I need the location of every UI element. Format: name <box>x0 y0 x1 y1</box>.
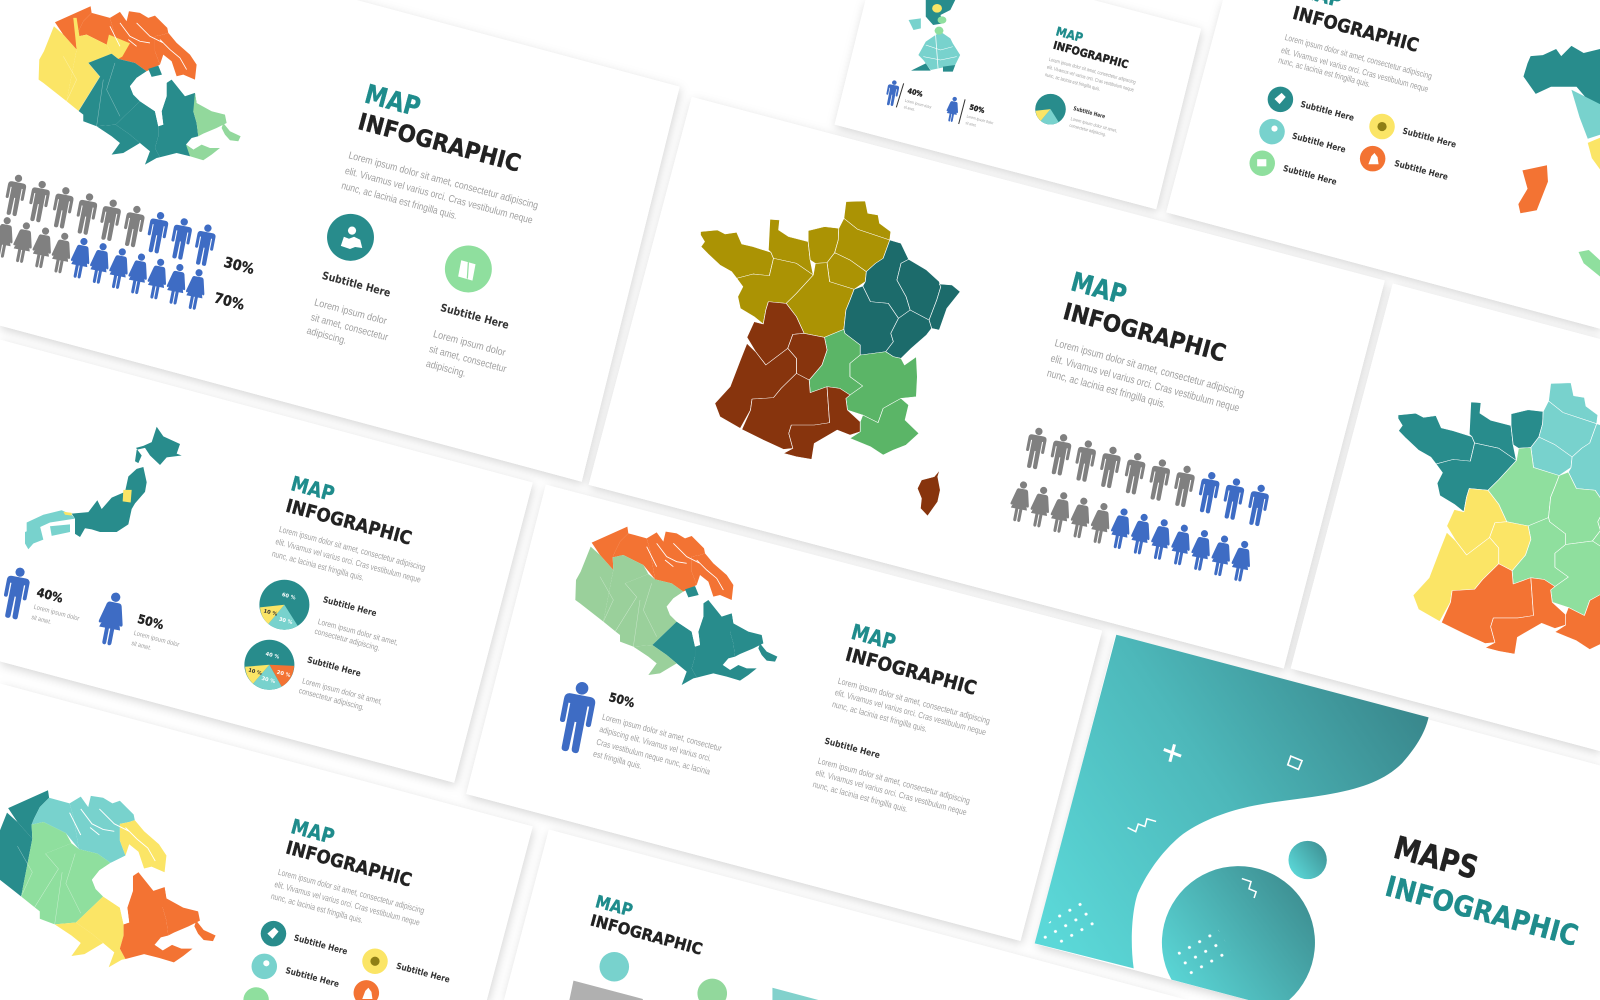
title INFOGRAPHIC: INFOGRAPHIC <box>843 644 979 700</box>
figure man 40 <box>0 566 32 621</box>
captions <box>298 617 399 712</box>
small captions: sit amet. <box>131 640 152 652</box>
people chart: women <box>1007 480 1254 583</box>
pie chart 2: 20 % <box>276 670 291 679</box>
title INFOGRAPHIC: INFOGRAPHIC <box>1290 3 1421 57</box>
body text: Lorem ipsum dolor sit amet, consectetur adipiscing <box>1048 57 1136 86</box>
map: Canada regions <box>0 790 216 967</box>
pie chart 2 <box>244 640 294 690</box>
small captions: sit amet. <box>903 104 916 112</box>
body text: nunc, ac lacinia est fringilla quis. <box>270 891 364 925</box>
map: Japan <box>25 427 182 549</box>
subtitle left: Subtitle Here <box>321 269 392 300</box>
teal swoosh shape <box>1035 635 1429 968</box>
panel: Canada slide middle <box>466 485 1102 941</box>
captions: consectetur adipiscing. <box>314 627 381 653</box>
small circle <box>1288 841 1327 879</box>
pie chart 1: 10 % <box>263 608 278 618</box>
title MAPS: MAPS <box>1390 830 1482 887</box>
body text: nunc, ac lacinia est fringilla quis. <box>831 699 928 734</box>
icon circles <box>243 921 388 1000</box>
subtitles: Subtitle Here <box>1291 132 1347 156</box>
map fragment <box>772 988 818 1000</box>
percent 70: 70% <box>212 290 246 314</box>
small text left: sit amet, consectetur <box>309 312 390 344</box>
icon: diamond <box>1288 756 1302 769</box>
small captions: Lorem ipsum dolor <box>966 113 994 126</box>
map: France regions <box>701 201 960 516</box>
small captions: sit amet. <box>31 614 52 626</box>
pie caption: Lorem ipsum dolor sit amet, <box>1070 116 1118 133</box>
pie chart 2: 10 % <box>247 668 262 677</box>
small captions: Lorem ipsum dolor <box>33 604 81 623</box>
body text: Lorem ipsum dolor sit amet, consectetur adipiscing <box>277 867 426 916</box>
figure man <box>554 679 599 755</box>
small text left <box>305 297 390 347</box>
subtitles: Subtitle Here <box>1393 159 1449 183</box>
title INFOGRAPHIC: INFOGRAPHIC <box>588 911 705 959</box>
title INFOGRAPHIC: INFOGRAPHIC <box>1382 869 1582 953</box>
map: United Kingdom <box>909 0 960 72</box>
subtitles: Subtitle Here <box>395 962 451 986</box>
icon circles <box>1249 87 1395 176</box>
subtitles: Subtitle Here <box>1401 127 1457 151</box>
panel: title slide <box>1035 635 1600 1000</box>
icon: map pin <box>327 214 374 261</box>
map: France regions coloured <box>1398 383 1600 654</box>
small captions <box>903 98 994 128</box>
description: Lorem ipsum dolor sit amet, consectetur <box>601 712 723 753</box>
body text: Lorem ipsum dolor sit amet, consectetur adipiscing <box>278 524 427 573</box>
icon: elevator <box>445 246 492 292</box>
figure man 40 <box>884 79 900 107</box>
subtitles <box>1282 100 1457 188</box>
people chart: men <box>1023 426 1271 527</box>
captions: consectetur adipiscing. <box>298 686 365 712</box>
body text: nunc, ac lacinia est fringilla quis. <box>271 548 365 583</box>
description: Cras vestibulum neque nunc, ac lacinia <box>595 737 711 777</box>
title INFOGRAPHIC: INFOGRAPHIC <box>1052 39 1130 71</box>
map: Italy <box>1518 46 1600 277</box>
icon: zigzag in circle <box>1242 879 1256 898</box>
small captions: Lorem ipsum dolor <box>904 98 933 110</box>
panel: Italy slide <box>1166 0 1600 329</box>
body text: elit. Vivamus vel varius orci. Cras vestibulum neque <box>344 166 534 227</box>
title MAP: MAP <box>289 814 337 849</box>
body text: elit. Vivamus vel varius orci. Cras vestibulum neque <box>1280 45 1430 94</box>
icon: light teal circle <box>599 952 629 982</box>
small text right: Lorem ipsum dolor <box>432 329 507 359</box>
title INFOGRAPHIC: INFOGRAPHIC <box>355 107 524 178</box>
pie chart 2: 30 % <box>261 676 276 685</box>
panel: UK slide <box>835 0 1201 209</box>
icon: plus <box>1164 744 1181 762</box>
percent 40: 40% <box>907 86 924 99</box>
pie chart <box>1035 94 1066 124</box>
title MAP: MAP <box>1068 267 1130 311</box>
small captions: Lorem ipsum dolor <box>133 630 181 649</box>
pie chart 1: 60 % <box>281 592 296 601</box>
body text: nunc, ac lacinia est fringilla quis. <box>340 181 458 222</box>
subtitle 1: Subtitle Here <box>322 595 378 619</box>
icon: green circle <box>697 979 727 1000</box>
subtitles <box>284 934 451 990</box>
captions: Lorem ipsum dolor sit amet, <box>301 676 383 706</box>
body text: elit. Vivamus vel varius orci. Cras vestibulum neque <box>274 536 422 585</box>
small text right <box>425 329 508 380</box>
map: Canada regions <box>39 6 241 165</box>
divider man <box>896 83 904 107</box>
pie chart 1 <box>259 580 309 630</box>
subtitle: Subtitle Here <box>1073 106 1106 120</box>
pie caption: consectetur adipiscing. <box>1069 123 1107 137</box>
panel: Japan slide <box>0 340 533 783</box>
title MAP: MAP <box>593 892 635 921</box>
percent 30: 30% <box>222 255 256 278</box>
body text: elit. Vivamus vel varius orci. Cras vestibulum neque <box>1046 65 1135 94</box>
small text left: adipiscing. <box>305 326 348 347</box>
title MAP: MAP <box>848 620 898 656</box>
subtitle: Subtitle Here <box>823 737 881 761</box>
pie chart 1: 30 % <box>278 617 293 626</box>
subtitles: Subtitle Here <box>1282 164 1338 188</box>
small captions <box>31 604 181 652</box>
subtitles: Subtitle Here <box>1299 100 1355 124</box>
panel: Canada slide bottom left <box>0 684 533 1000</box>
body text: elit. Vivamus vel varius orci. Cras vestibulum neque <box>834 687 987 737</box>
title INFOGRAPHIC: INFOGRAPHIC <box>283 838 414 891</box>
divider woman <box>959 99 965 124</box>
description <box>592 712 723 777</box>
percent 50: 50% <box>136 612 165 632</box>
description: est fringilla quis. <box>592 748 643 771</box>
small text right: sit amet, consectetur <box>428 344 508 375</box>
title MAP: MAP <box>289 471 337 506</box>
grey card <box>569 981 643 1000</box>
small text left: Lorem ipsum dolor <box>313 297 388 327</box>
big circle <box>1162 866 1315 1000</box>
body text: elit. Vivamus vel varius orci. Cras vestibulum neque <box>1049 353 1241 415</box>
body text: Lorem ipsum dolor sit amet, consectetur adipiscing <box>837 676 991 726</box>
body text 2: nunc, ac lacinia est fringilla quis. <box>812 779 909 814</box>
subtitle 2: Subtitle Here <box>306 655 362 679</box>
captions: Lorem ipsum dolor sit amet, <box>317 617 399 647</box>
map: Canada regions <box>575 527 777 685</box>
title MAP: MAP <box>1054 24 1085 45</box>
body text: nunc, ac lacinia est fringilla quis. <box>1277 55 1372 89</box>
body text: elit. Vivamus vel varius orci. Cras vestibulum neque <box>273 879 421 928</box>
subtitle right: Subtitle Here <box>439 301 510 332</box>
small text right: adipiscing. <box>425 359 467 380</box>
body text 2: Lorem ipsum dolor sit amet, consectetur adipiscing <box>817 756 971 806</box>
body text: nunc, ac lacinia est fringilla quis. <box>1044 72 1101 93</box>
subtitles: Subtitle Here <box>284 966 340 990</box>
figure woman 50 <box>95 590 128 647</box>
pie chart 2: 40 % <box>265 651 280 661</box>
body text: nunc, ac lacinia est fringilla quis. <box>1046 367 1167 411</box>
percent 40: 40% <box>35 585 64 606</box>
percent 50: 50% <box>968 102 986 115</box>
people chart: men <box>2 173 218 267</box>
icon: zigzag <box>1128 819 1156 832</box>
panel: bottom middle slide <box>504 830 1187 1000</box>
title MAP: MAP <box>361 79 424 123</box>
dot pattern 1 <box>1036 893 1101 948</box>
title INFOGRAPHIC: INFOGRAPHIC <box>283 496 414 550</box>
figure woman 50 <box>945 96 961 123</box>
body text: Lorem ipsum dolor sit amet, consectetur adipiscing <box>347 150 540 212</box>
small captions: sit amet. <box>965 120 977 128</box>
panel: France slide right <box>1291 284 1600 751</box>
body text: Lorem ipsum dolor sit amet, consectetur adipiscing <box>1284 32 1433 81</box>
panel: Canada slide top left <box>0 0 680 482</box>
percent 50: 50% <box>607 690 636 710</box>
panel: France slide centre <box>589 97 1385 668</box>
people chart: women <box>0 215 209 311</box>
body text: Lorem ipsum dolor sit amet, consectetur adipiscing <box>1053 337 1246 400</box>
description: adipiscing elit. Vivamus vel varius orci. <box>598 724 712 763</box>
body text 2: elit. Vivamus vel varius orci. Cras vestibulum neque <box>814 767 968 817</box>
subtitles: Subtitle Here <box>293 934 349 957</box>
title INFOGRAPHIC: INFOGRAPHIC <box>1060 297 1229 367</box>
